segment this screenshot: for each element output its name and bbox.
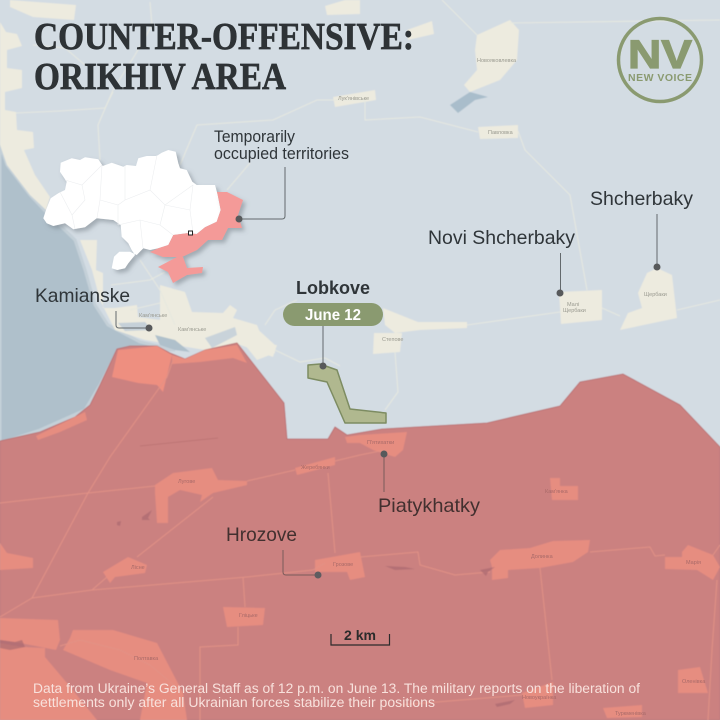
map: small settlement names: Кам'янське [178,327,206,333]
label: Hrozove: Hrozove [226,524,297,546]
map: small settlement names in occupied territory [131,440,706,717]
map: small settlement names in occupied territory: Гліцьке [239,613,258,619]
map: small settlement names: Щербаки [644,292,667,298]
map: sea [0,145,175,443]
label: Shcherbaky: Shcherbaky [590,188,693,210]
scale bar: 2 km [331,627,390,645]
map: small settlement names in occupied territory: Новоукраїнка [522,695,557,701]
water marks within occupied territory [0,510,515,707]
map: small settlement names: Степове [382,337,403,343]
map: small settlement names in occupied territory: П'ятихатки [367,440,394,446]
label: Hrozove [226,524,322,578]
map: small settlement names: Новояковлевка [477,58,517,64]
map: small settlement names [139,58,667,418]
map: small settlement names: Щербаки [563,308,586,314]
occupied territory [150,192,243,283]
label: Novi Shcherbaky: Novi Shcherbaky [428,227,575,249]
map: occupied territory [0,343,720,720]
label: Piatykhatky [378,450,480,517]
label: Lobkove with date: June 12 [305,307,361,324]
title [34,16,414,98]
map: Kamianske inlet [118,322,152,331]
free territory [43,150,221,270]
footnote: Data from Ukraine’s General Staff as of 12 p.m. on June 13. The military reports on the liberation of [33,681,640,696]
label: Lobkove with date: Lobkove [296,278,370,298]
footnote [33,681,640,710]
liberated area: Lobkove [308,364,386,423]
footnote: settlements only after all Ukrainian forces stabilize their positions [33,695,435,710]
inset map: Ukraine [43,150,243,283]
map: small settlement names in occupied territory: Туркменівка [615,711,647,717]
label: Lobkove with date [283,278,386,423]
map: small settlement names in occupied territory: Марія [686,560,701,566]
settlements within occupied territory [0,345,720,720]
map: small settlement names in occupied territory: Оленівка [682,679,706,685]
callout: temporarily occupied territories: occupied territories [214,145,349,163]
oblast borders [60,155,193,248]
label: Shcherbaky [590,188,693,270]
scale bar: 2 km: 2 km [344,627,376,643]
map: lagoon inside settlement [205,327,237,348]
callout: temporarily occupied territories [214,128,349,222]
roads within occupied territory [0,360,720,720]
map: small settlement names in occupied territory: Луговe [178,479,195,485]
map: small settlement names in occupied territory: Долинка [531,554,554,560]
callout: temporarily occupied territories: Temporarily [214,128,296,146]
map: small settlement names in occupied territory: Грозове [333,562,353,568]
map: small settlement names: Лобкове [352,412,373,418]
location marker [188,231,192,235]
map: small settlement names in occupied territory: Жеребянки [301,465,330,471]
label: Novi Shcherbaky [428,227,575,296]
map: settlements and coast on land [0,0,677,360]
logo: NV New Voice: NV [628,33,692,77]
logo: NV New Voice: NEW VOICE [628,72,692,84]
map: small settlement names: Малі [567,302,579,308]
logo: NV New Voice [618,18,702,102]
label: Kamianske: Kamianske [35,285,130,307]
map: small settlement names: Кам'янське [139,313,167,319]
title: COUNTER-OFFENSIVE: [34,16,414,58]
title: ORIKHIV AREA [34,56,286,98]
map: small settlement names: Лук'янівське [338,96,369,102]
map: small settlement names in occupied territory: Лісне [131,565,145,571]
label: Piatykhatky: Piatykhatky [378,495,480,517]
map: small settlement names: Павловка [488,130,514,136]
map: small settlement names in occupied territory: Кам'янка [545,489,569,495]
label: Kamianske [35,285,152,332]
map: lake [450,92,488,113]
map: roads on land [16,0,720,410]
map: Dnipro shallows [155,335,190,352]
map: small settlement names in occupied territory: Полтавка [134,656,159,662]
